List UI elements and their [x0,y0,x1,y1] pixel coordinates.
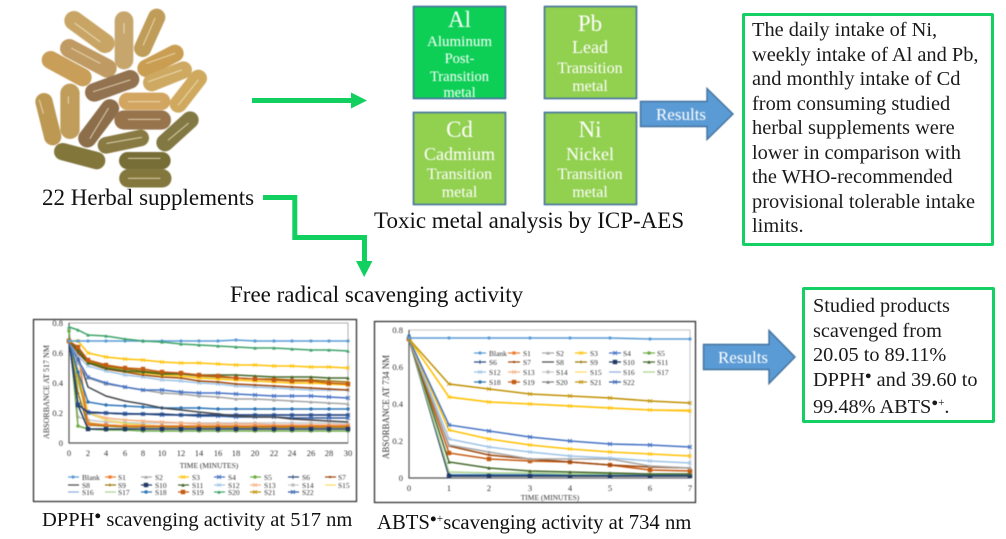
panel: aluminum element tile: metal [443,85,476,101]
chart legend: S1 [118,473,126,482]
chart legend: S2 [155,473,163,482]
callout: radical scavenging results: scavenged from [813,320,942,342]
x axis labels: 1 [447,483,451,493]
chart legend: S15 [338,481,350,490]
x axis labels: 7 [688,483,692,493]
y axis labels: 0.4 [392,399,404,409]
callout: toxic metal results: the WHO-recommended [752,166,953,188]
heading: free radical scavenging activity: Free radical scavenging activity [230,282,523,307]
chart: DPPH scavenging line chart [32,318,358,503]
x axis labels: 18 [232,448,240,458]
chart legend: S10 [155,481,167,490]
chart legend: S21 [264,488,276,497]
x axis labels: 10 [158,448,166,458]
chart legend: S13 [264,481,276,490]
heading: 22 Herbal supplements: 22 Herbal supplements [42,185,254,210]
panel: nickel element tile: Nickel [566,144,614,164]
x axis labels: 14 [195,448,204,458]
x axis labels: 8 [141,448,145,458]
y axis title: ABSORBANCE AT 734 NM [381,355,391,459]
y axis labels: 0.6 [392,362,403,372]
chart legend: S17 [118,488,130,497]
chart legend: Blank [489,349,507,358]
callout: radical scavenging results: DPPH● and 39.60 to [813,368,978,390]
x axis labels: 4 [568,483,573,493]
chart: ABTS scavenging line chart [373,320,697,504]
callout: toxic metal results: from consuming studied [752,92,950,114]
chart legend: S7 [338,473,346,482]
panel: cadmium element tile [412,110,508,206]
x axis title: TIME (MINUTES) [180,461,239,470]
chart legend [68,473,350,497]
panel: cadmium element tile: Transition [427,166,492,183]
chart legend: S6 [489,358,497,367]
chart legend: S4 [228,473,236,482]
x axis labels: 20 [251,448,259,458]
arrow: results of toxic metal analysis: Results [656,105,706,124]
x axis labels: 16 [214,448,222,458]
x axis labels: 0 [67,448,71,458]
chart legend: S3 [192,473,200,482]
callout: toxic metal results: The daily intake of Ni, [752,19,937,41]
photo: herbal supplement capsules [34,8,208,188]
panel: lead element tile [542,4,638,100]
chart legend: S11 [657,358,669,367]
panel: aluminum element tile: Aluminum [427,34,492,50]
chart legend: S17 [657,368,669,377]
x axis labels: 5 [608,483,612,493]
callout: toxic metal results: herbal supplements were [752,117,955,139]
callout: radical scavenging results [802,287,995,423]
y axis labels: 0.6 [52,348,63,358]
chart legend: S16 [82,488,94,497]
chart legend: S22 [623,378,635,387]
arrow: results of toxic metal analysis [639,86,734,142]
panel: aluminum element tile: Post- [445,51,475,67]
x axis labels: 22 [270,448,278,458]
y axis labels: 0 [399,473,403,483]
chart legend: S19 [523,378,535,387]
x axis labels: 26 [307,448,315,458]
chart legend: S2 [556,349,564,358]
chart legend: S22 [302,488,314,497]
chart legend: S9 [118,481,126,490]
arrow: supplements to toxic metal analysis [252,92,367,108]
heading: toxic metal analysis: Toxic metal analysis by ICP-AES [374,208,684,233]
chart legend: S12 [489,368,501,377]
chart legend: S18 [155,488,167,497]
panel: nickel element tile: Transition [557,166,623,183]
caption: DPPH scavenging activity: DPPH● scavenging activity at 517 nm [42,509,352,531]
panel: aluminum element tile: Al [448,7,471,32]
x axis labels: 6 [123,448,127,458]
y axis labels: 0 [59,438,63,448]
panel: lead element tile: Transition [557,60,623,77]
panel: lead element tile: metal [572,78,608,95]
y axis labels: 0.4 [52,378,64,388]
data series [69,327,348,431]
chart legend: S19 [192,488,204,497]
chart legend: S8 [556,358,564,367]
panel: nickel element tile: metal [572,184,608,201]
panel: nickel element tile [542,110,638,206]
y axis labels [392,325,404,483]
callout: toxic metal results: weekly intake of Al and Pb, [752,44,979,66]
chart legend: S18 [489,378,501,387]
chart legend: S16 [623,368,635,377]
panel: lead element tile: Lead [572,37,608,57]
panel: lead element tile: Pb [578,11,602,36]
panel: aluminum element tile: Transition [430,69,490,85]
chart legend: S14 [556,368,568,377]
data series [409,336,690,477]
chart legend: S10 [623,358,635,367]
x axis title: TIME (MINUTES) [521,493,580,502]
x axis labels: 3 [528,483,532,493]
x axis labels [67,448,352,458]
chart legend: S14 [302,481,314,490]
x axis labels: 2 [86,448,90,458]
callout: radical scavenging results: 99.48% ABTS●+. [813,396,949,418]
callout: radical scavenging results: 20.05 to 89.11% [813,344,946,366]
chart legend: S5 [264,473,272,482]
chart legend: S8 [82,481,90,490]
chart legend: S15 [590,368,602,377]
callout: toxic metal results: limits. [752,215,804,237]
x axis labels: 28 [325,448,333,458]
chart legend: S21 [590,378,602,387]
caption: ABTS scavenging activity: ABTS●+scavenging activity at 734 nm [377,512,691,534]
chart legend: S11 [192,481,204,490]
panel: cadmium element tile: Cadmium [424,144,495,164]
y axis labels: 0.2 [52,408,63,418]
panel: aluminum element tile [412,4,508,101]
x axis labels: 2 [487,483,491,493]
chart legend: S20 [556,378,568,387]
callout: toxic metal results: provisional tolerable intake [752,190,975,212]
chart legend: S5 [657,349,665,358]
callout: radical scavenging results: Studied products [813,295,950,317]
x axis labels: 4 [104,448,109,458]
x axis labels: 0 [407,483,411,493]
arrow: supplements to free radical scavenging [263,195,372,277]
callout: toxic metal results: and monthly intake of Cd [752,68,960,90]
y axis labels: 0.2 [392,436,403,446]
arrow: results of radical scavenging: Results [718,348,768,367]
x axis labels: 24 [288,448,297,458]
chart legend [474,349,669,387]
x axis labels: 30 [344,448,352,458]
chart legend: S4 [623,349,631,358]
chart legend: S1 [523,349,531,358]
chart legend: S13 [523,368,535,377]
callout: toxic metal results [742,13,994,246]
chart legend: S6 [302,473,310,482]
chart legend: Blank [82,473,100,482]
x axis labels: 12 [177,448,185,458]
chart legend: S12 [228,481,240,490]
y axis labels [52,318,64,448]
x axis labels: 6 [648,483,652,493]
y axis title: ABSORBANCE AT 517 NM [42,345,51,439]
chart legend: S3 [590,349,598,358]
y axis labels: 0.8 [392,325,403,335]
y axis labels: 0.8 [52,318,63,328]
panel: cadmium element tile: metal [442,184,478,201]
chart legend: S7 [523,358,531,367]
chart legend: S20 [228,488,240,497]
arrow: results of radical scavenging [702,328,796,386]
x axis labels [407,483,692,493]
panel: nickel element tile: Ni [578,117,602,142]
chart legend: S9 [590,358,598,367]
callout: toxic metal results: lower in comparison with [752,142,961,164]
panel: cadmium element tile: Cd [446,117,473,142]
